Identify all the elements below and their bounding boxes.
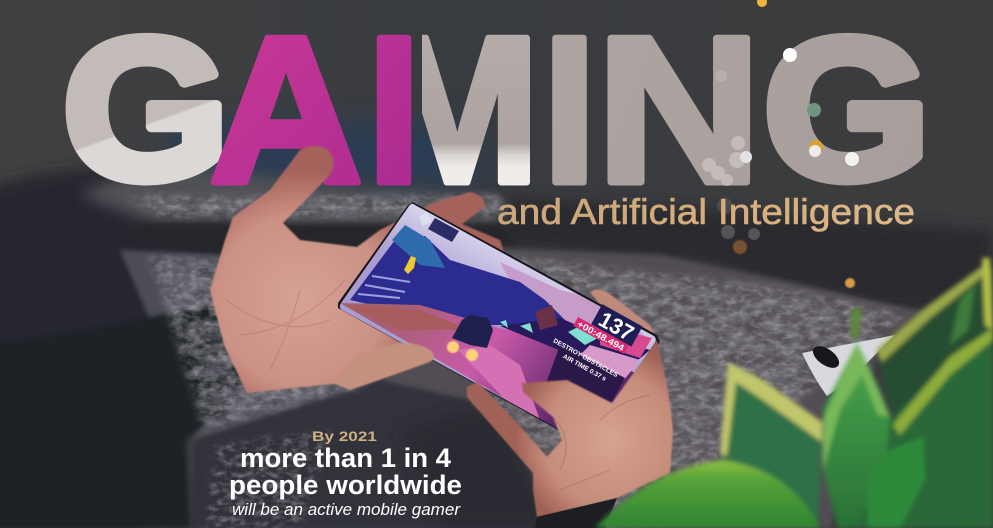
caption line 3: will be an active mobile gamer [232, 500, 461, 519]
letter G: G [63, 0, 229, 221]
leaf: large right [845, 330, 993, 528]
left hand [210, 146, 520, 393]
icon: yellow map marker [404, 256, 416, 274]
hud: speed and time: +00:48.494 [576, 319, 626, 353]
right hand [467, 340, 673, 517]
icon: chevrons [500, 320, 598, 345]
caption line 2: people worldwide [229, 470, 462, 500]
icon: pause button [419, 212, 432, 226]
leaf: left [722, 363, 822, 528]
left hand index finger over phone [333, 343, 434, 390]
leaf: far right [877, 262, 993, 417]
right sleeve [535, 498, 617, 528]
white smartphone on fur [802, 335, 895, 396]
fur texture [125, 196, 905, 528]
letter M: M [374, 0, 540, 227]
bokeh lights [717, 0, 855, 288]
bokeh over title [702, 48, 859, 186]
hud: score panel [428, 218, 459, 242]
left sleeve [0, 292, 252, 528]
caption [229, 428, 462, 519]
hud: speed and time: 137 [595, 307, 638, 346]
right hand back finger [590, 290, 660, 345]
plant leaves [595, 258, 993, 528]
caption year: By 2021 [312, 428, 377, 444]
hud: time label [573, 317, 629, 354]
hud: speed and time [547, 292, 645, 387]
letters AI highlighted in magenta: I [367, 0, 421, 227]
letters IN: I [542, 0, 596, 227]
letters AI highlighted in magenta: A [209, 0, 363, 227]
leaf: small bright [868, 437, 925, 528]
leaf: bottom [595, 460, 820, 528]
letter final G: G [764, 0, 930, 221]
icon: race car with headlights [447, 315, 493, 361]
leaf: center [823, 343, 890, 528]
phone [338, 202, 660, 430]
subtitle: and Artificial Intelligence [497, 191, 915, 232]
finger creases [553, 395, 650, 490]
caption line 1: more than 1 in 4 [240, 443, 451, 473]
letters IN: N [596, 0, 762, 227]
palm creases [226, 280, 345, 370]
icon: camera bump [809, 342, 843, 372]
hud: speed and time: AIR TIME 0.37 s [561, 353, 608, 383]
hud: speed box [591, 304, 643, 347]
phone screen game scene [340, 204, 656, 428]
hud: objective text: DESTROY OBSTACLES [552, 338, 619, 379]
title: GAIMING [66, 32, 923, 186]
